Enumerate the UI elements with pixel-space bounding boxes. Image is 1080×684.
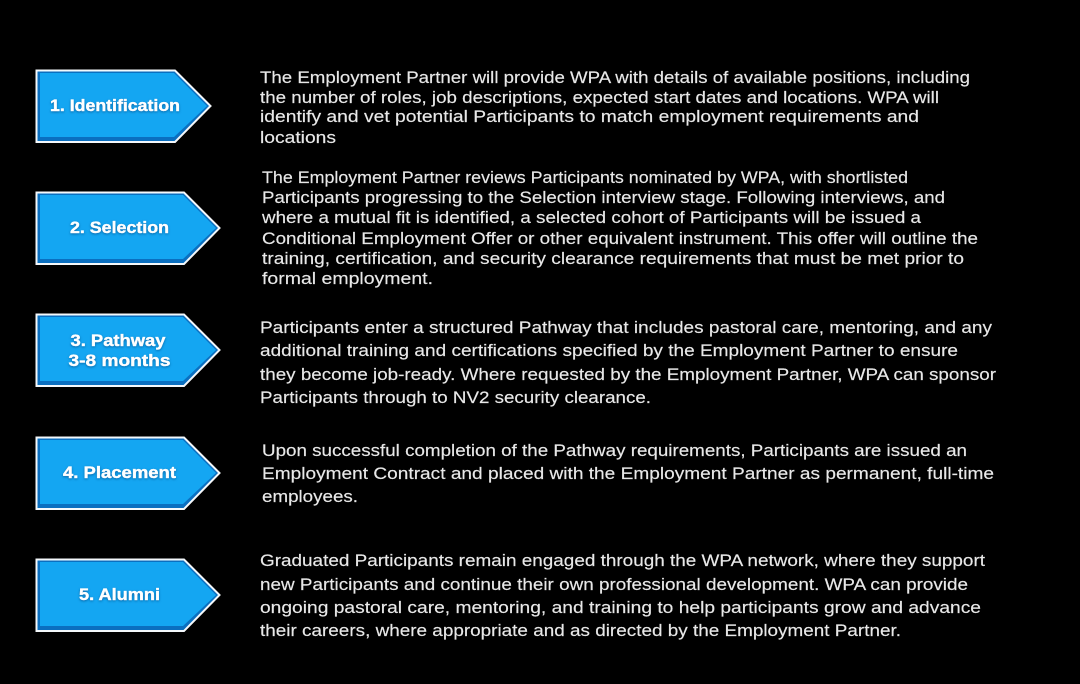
- text: identification description: [260, 69, 970, 147]
- text: pathway description: they become job-ready. Where requested by the Employment Partner, WPA can sponsor: [260, 366, 997, 384]
- arrow: 5. Alumni: 5. Alumni: [79, 585, 160, 604]
- text: placement description: Employment Contract and placed with the Employment Partner as permanent, full-time: [262, 465, 994, 483]
- text: identification description: locations: [260, 129, 336, 147]
- text: selection description: where a mutual fit is identified, a selected cohort of Participants will be issued a: [261, 209, 922, 227]
- text: alumni description: new Participants and continue their own professional development. WPA can provide: [260, 576, 968, 594]
- arrow: 3. Pathway 3-8 months: 3. Pathway: [70, 331, 166, 350]
- text: pathway description: additional training and certifications specified by the Employment Partner to ensure: [260, 342, 958, 360]
- arrow: 1. Identification: [36, 70, 210, 142]
- text: pathway description: Participants through to NV2 security clearance.: [260, 389, 651, 407]
- step 1: identification: [36, 69, 970, 147]
- step 5: alumni: [36, 552, 985, 640]
- text: selection description: training, certification, and security clearance requirements that must be met prior to: [262, 250, 964, 268]
- text: alumni description: their careers, where appropriate and as directed by the Employment Partner.: [260, 622, 901, 640]
- text: selection description: The Employment Partner reviews Participants nominated by WPA, with shortlisted: [262, 169, 908, 187]
- text: placement description: Upon successful completion of the Pathway requirements, Participants are issued an: [262, 442, 967, 460]
- arrow: 4. Placement: 4. Placement: [63, 463, 176, 482]
- text: identification description: The Employment Partner will provide WPA with details of available positions, including: [260, 69, 970, 87]
- arrow: 2. Selection: [36, 192, 220, 264]
- step 2: selection: [36, 169, 978, 288]
- text: selection description: Participants progressing to the Selection interview stage. Following interviews, and: [262, 189, 945, 207]
- text: placement description: [262, 442, 994, 506]
- text: selection description: [261, 169, 978, 288]
- text: alumni description: Graduated Participants remain engaged through the WPA network, where they support: [260, 552, 985, 570]
- arrow: 3. Pathway 3-8 months: [36, 314, 220, 386]
- step 4: placement: [36, 438, 994, 509]
- text: identification description: identify and vet potential Participants to match employment requirements and: [260, 108, 919, 126]
- text: alumni description: ongoing pastoral care, mentoring, and training to help participants grow and advance: [260, 599, 981, 617]
- arrow: 3. Pathway 3-8 months: 3-8 months: [68, 351, 170, 370]
- text: identification description: the number of roles, job descriptions, expected start dates and locations. WPA will: [260, 89, 939, 107]
- arrow: 1. Identification: 1. Identification: [50, 96, 180, 115]
- text: pathway description: [260, 319, 997, 407]
- step 3: pathway: [36, 314, 997, 407]
- text: selection description: Conditional Employment Offer or other equivalent instrument. This offer will outline the: [262, 230, 978, 248]
- arrow: 4. Placement: [36, 438, 220, 509]
- text: placement description: employees.: [262, 488, 358, 506]
- arrow: 5. Alumni: [36, 560, 220, 631]
- arrow: 2. Selection: 2. Selection: [70, 218, 169, 237]
- text: alumni description: [260, 552, 985, 640]
- text: selection description: formal employment.: [262, 270, 433, 288]
- text: pathway description: Participants enter a structured Pathway that includes pastoral care, mentoring, and any: [260, 319, 993, 337]
